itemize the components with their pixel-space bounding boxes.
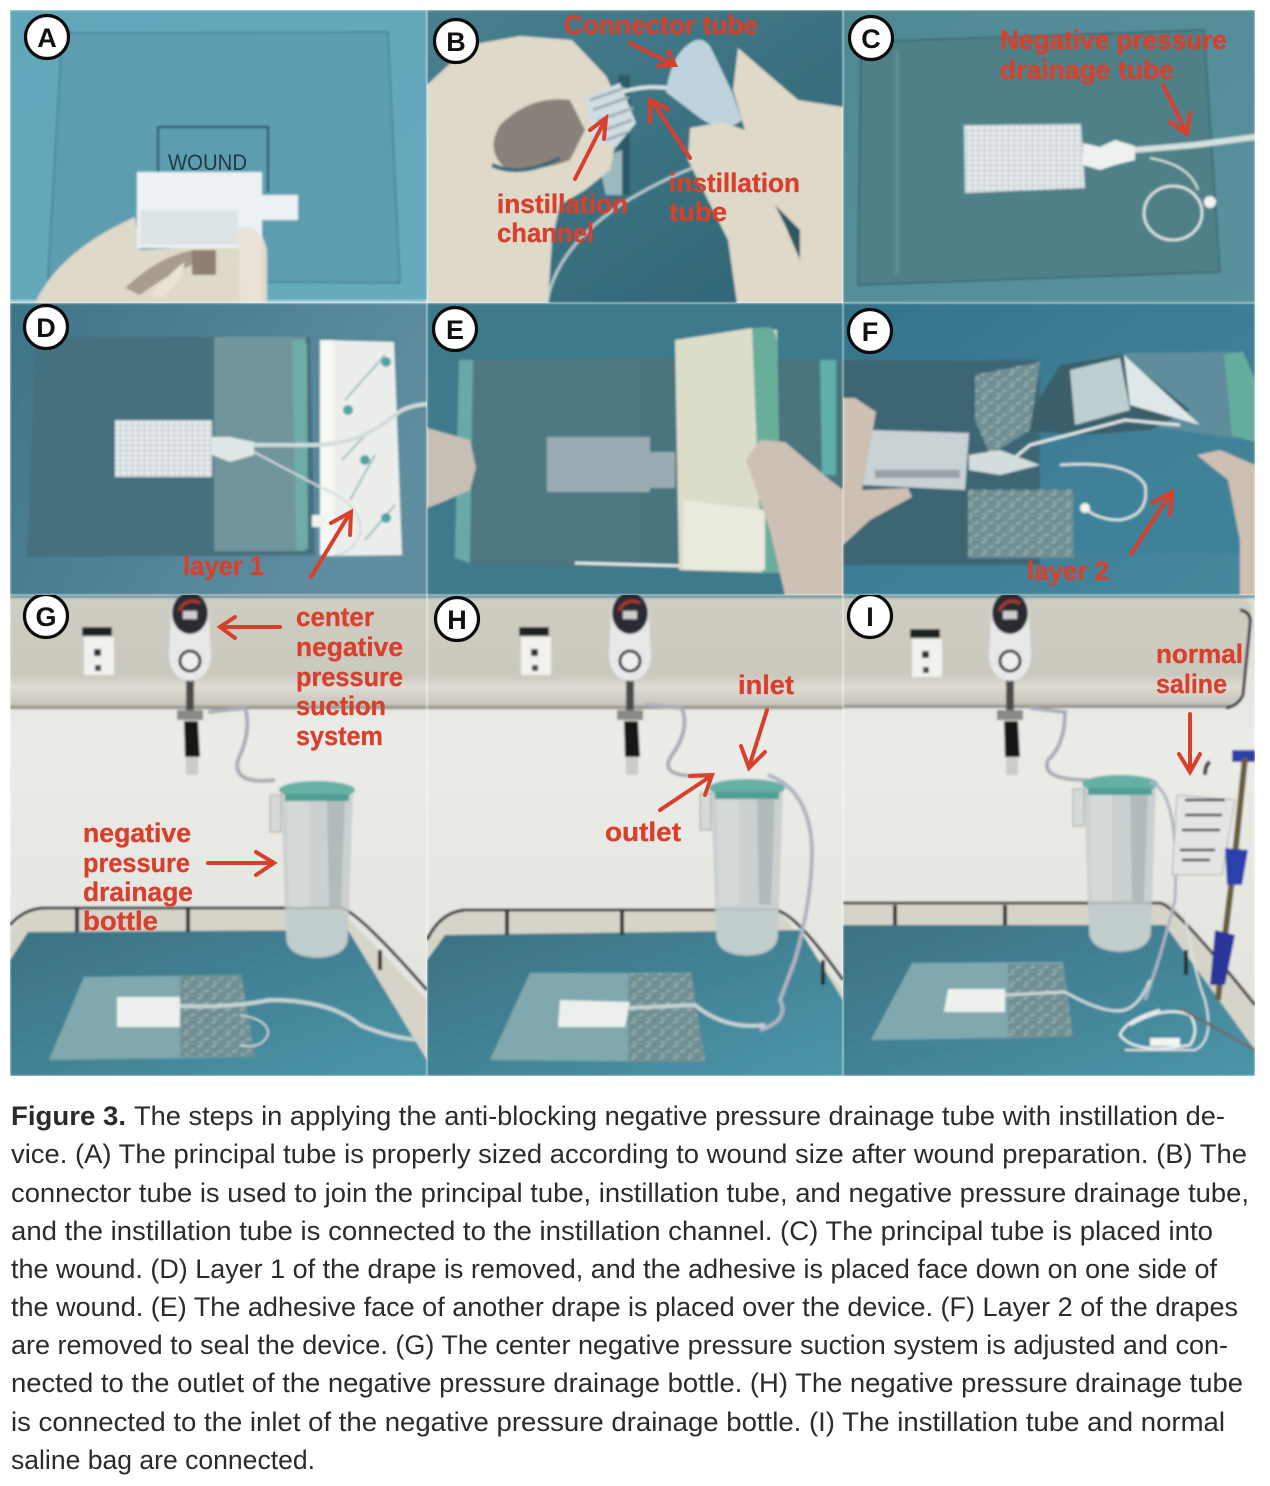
- caption: Figure 3 text block: the wound. (D) Layer 1 of the drape is removed, and the adhesive is placed face down on one side of: [11, 1254, 1218, 1284]
- caption: Figure 3 text block: vice. (A) The principal tube is properly sized according to wound size after wound preparation. (B) The: [11, 1139, 1247, 1169]
- badge F: F: [862, 317, 878, 347]
- badge A: [26, 16, 68, 58]
- panel A: gauze sized over wound template: [10, 10, 427, 303]
- badge B: B: [446, 27, 466, 57]
- photo D: [10, 303, 427, 595]
- photo I: [843, 591, 1255, 1076]
- label: center negative pressure suction system: center: [296, 602, 374, 632]
- photo A: [10, 10, 427, 303]
- label: Connector tube: Connector tube: [564, 10, 758, 40]
- arrow: to saline bag: [1179, 714, 1200, 772]
- arrow: to instillation tube: [650, 100, 690, 158]
- badge B: [434, 20, 478, 62]
- arrow: to instillation channel: [575, 118, 606, 179]
- badge E: E: [446, 315, 464, 345]
- caption: Figure 3 text block: nected to the outlet of the negative pressure drainage bottle. (H) The negative pressure drainage tube: [11, 1368, 1243, 1398]
- arrow: to outlet: [660, 775, 712, 810]
- caption: Figure 3 text block: are removed to seal the device. (G) The center negative pressure suction system is adjusted and con-: [11, 1330, 1228, 1360]
- label: center negative pressure suction system: pressure: [296, 662, 403, 692]
- arrow: to layer 1: [311, 512, 351, 577]
- label: instillation channel: instillation: [497, 189, 628, 219]
- panel C: principal tube placed into wound: [843, 10, 1255, 303]
- arrow: to drainage bottle: [208, 852, 274, 875]
- badge C: C: [861, 24, 881, 54]
- panel D: layer 1 of drape removed: [10, 303, 427, 595]
- panel G: center suction system and drainage bottle: [10, 591, 427, 1076]
- panel E: second drape placed over device: [427, 303, 843, 595]
- label: negative pressure drainage bottle: bottle: [83, 906, 158, 936]
- badge D: D: [36, 313, 56, 343]
- arrow: to layer 2: [1131, 492, 1172, 554]
- label: negative pressure drainage bottle: drainage: [83, 877, 193, 907]
- label: Negative pressure drainage tube: drainage tube: [1000, 55, 1174, 85]
- label: center negative pressure suction system: negative: [296, 632, 403, 662]
- photo B: [427, 10, 843, 303]
- label: inlet: inlet: [738, 670, 794, 700]
- photo C: [843, 10, 1255, 303]
- label: WOUND handwriting: WOUND: [168, 150, 247, 175]
- label: center negative pressure suction system: suction: [296, 691, 386, 721]
- badge I: [848, 594, 892, 638]
- badge A: A: [37, 23, 57, 53]
- arrow: to connector tube: [630, 43, 675, 66]
- label: layer 2: layer 2: [1027, 556, 1109, 586]
- panel F: layer 2 of drapes removed: [843, 303, 1255, 595]
- label: negative pressure drainage bottle: negative: [83, 818, 191, 848]
- label: negative pressure drainage bottle: pressure: [83, 848, 190, 878]
- label: outlet: outlet: [605, 817, 681, 847]
- badge C: [850, 16, 892, 60]
- caption: Figure 3 text block: connector tube is used to join the principal tube, instillation tube, and negative pressure drainage tube,: [11, 1178, 1249, 1208]
- panel H: drainage tube connected to inlet: [427, 591, 843, 1076]
- label: center negative pressure suction system: system: [296, 721, 383, 751]
- caption: Figure 3 text block: The steps in applying the anti-blocking negative pressure drainage tube with instillation de-: [134, 1101, 1225, 1131]
- panel B: connector and instillation tubes: [427, 10, 843, 303]
- photo G: [10, 591, 427, 1076]
- badge E: [434, 308, 476, 350]
- label: instillation tube: tube: [669, 197, 727, 227]
- badge G: G: [35, 602, 57, 632]
- label: instillation channel: channel: [497, 218, 594, 248]
- caption: Figure 3 text block: [11, 1101, 1249, 1475]
- photo F: [843, 303, 1255, 595]
- badge D: [24, 306, 68, 348]
- badge F: [848, 310, 892, 352]
- caption: Figure 3 text block: Figure 3.: [11, 1101, 126, 1131]
- panel I: instillation tube and saline bag connected: [843, 591, 1255, 1076]
- photo E: [427, 303, 843, 595]
- arrow: to suction system: [220, 617, 280, 638]
- label: layer 1: layer 1: [183, 551, 264, 581]
- label: Negative pressure drainage tube: Negative pressure: [1000, 25, 1227, 55]
- photo H: [427, 591, 843, 1076]
- caption: Figure 3 text block: and the instillation tube is connected to the instillation channel. (C) The principal tube is placed into: [11, 1216, 1213, 1246]
- label: normal saline: saline: [1156, 669, 1227, 699]
- badge H: H: [447, 605, 467, 635]
- badge G: [24, 594, 68, 638]
- label: instillation tube: instillation: [669, 168, 800, 198]
- caption: Figure 3 text block: saline bag are connected.: [11, 1445, 315, 1475]
- caption: Figure 3 text block: the wound. (E) The adhesive face of another drape is placed over the device. (F) Layer 2 of the drapes: [11, 1292, 1238, 1322]
- badge I: I: [866, 602, 874, 632]
- badge H: [436, 598, 478, 640]
- caption: Figure 3 text block: is connected to the inlet of the negative pressure drainage bottle. (I) The instillation tube and normal: [11, 1407, 1225, 1437]
- arrow: to inlet: [741, 710, 767, 768]
- arrow: to drainage tube: [1163, 85, 1190, 134]
- label: normal saline: normal: [1156, 639, 1243, 669]
